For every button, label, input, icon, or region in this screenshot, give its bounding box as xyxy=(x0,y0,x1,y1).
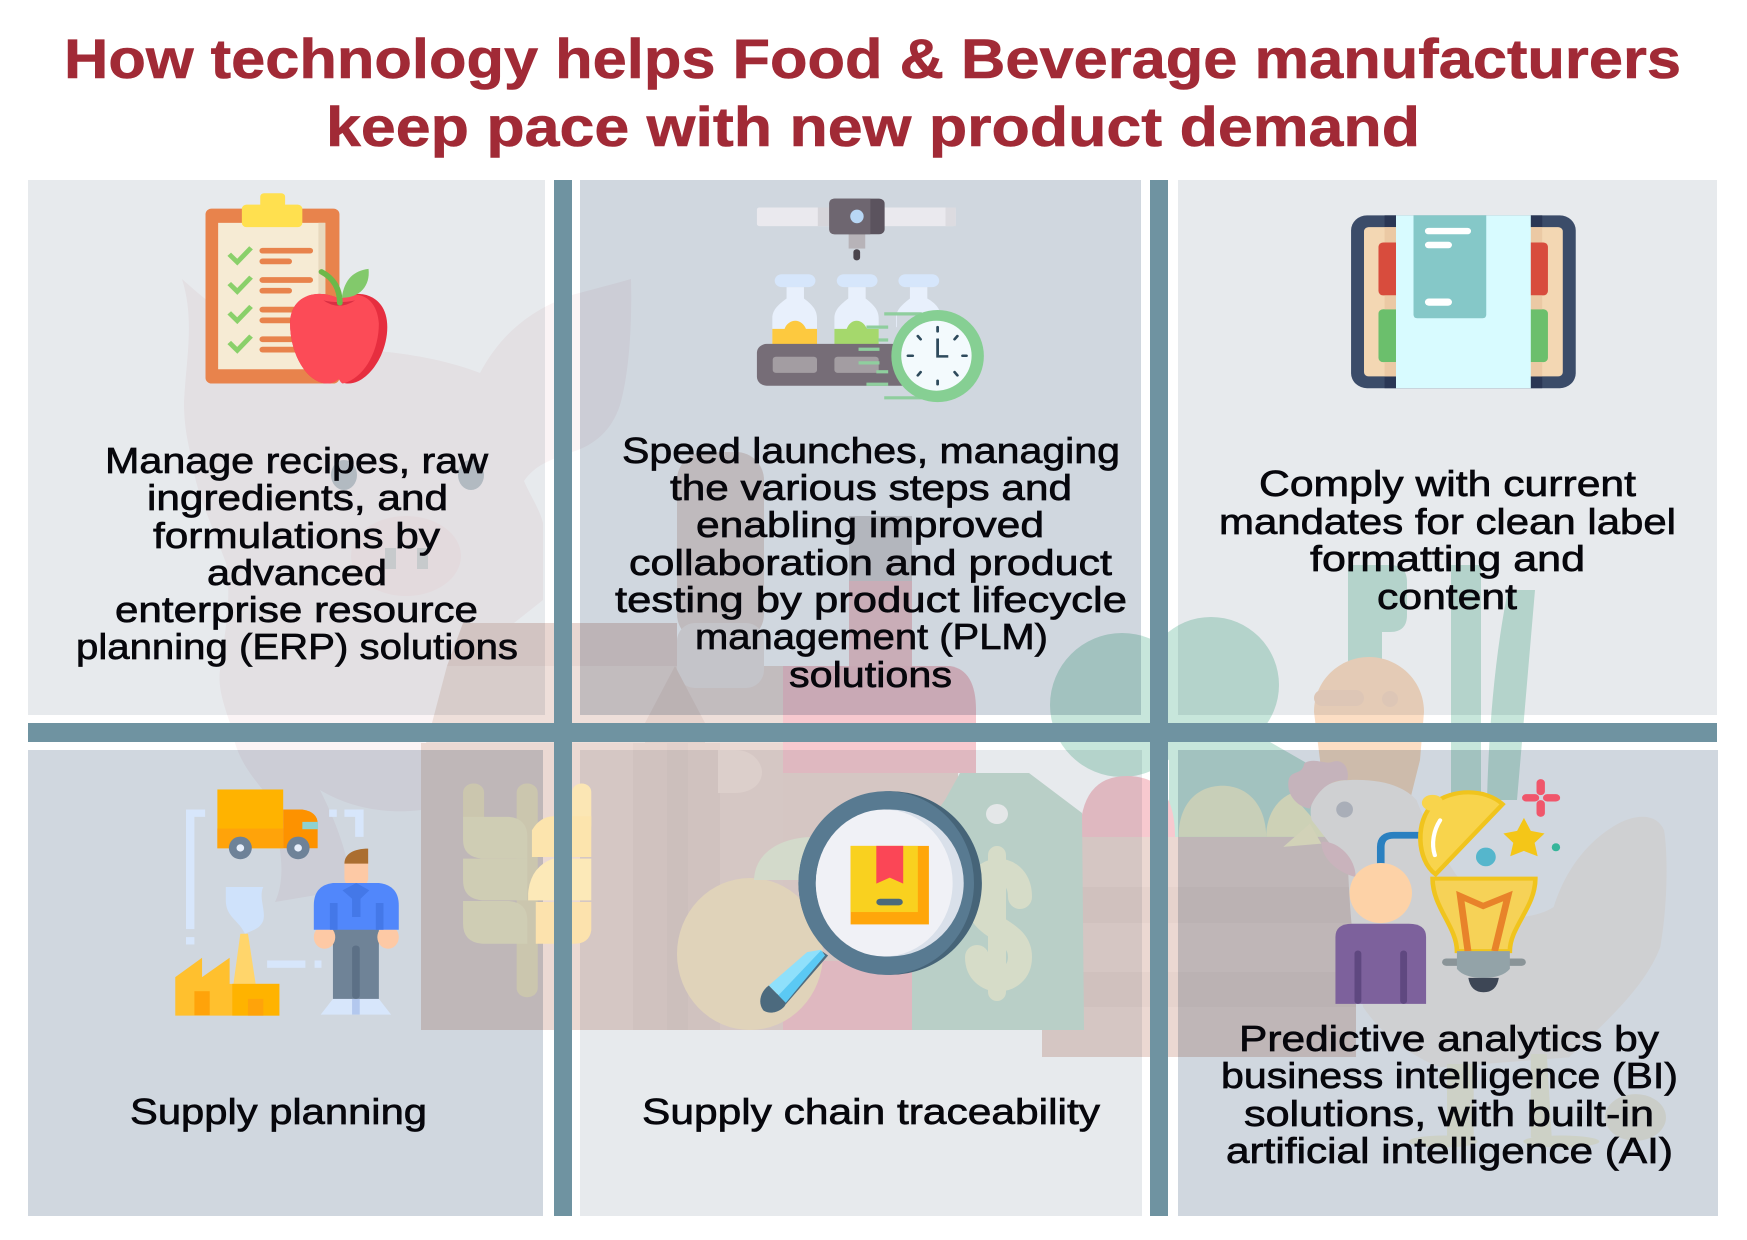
text: content xyxy=(1377,576,1517,617)
watermark: tag hole and dollar sign xyxy=(977,804,1020,992)
text: management (PLM) xyxy=(695,616,1048,657)
panel: traceability xyxy=(580,750,1142,1216)
watermark: barn and bottles xyxy=(421,452,976,1030)
text: enabling improved xyxy=(696,504,1044,545)
text: artificial intelligence (AI) xyxy=(1226,1130,1673,1171)
watermark: wheat xyxy=(463,783,591,997)
text: testing by product lifecycle xyxy=(615,579,1127,620)
watermark: green lump and light shapes xyxy=(718,750,813,880)
panel: supply planning xyxy=(28,750,543,1216)
text xyxy=(76,440,518,667)
text: mandates for clean label xyxy=(1219,501,1676,542)
text: solutions xyxy=(789,654,952,695)
text: planning (ERP) solutions xyxy=(76,626,518,667)
watermark: food illustration behind the grid xyxy=(182,279,1535,1057)
text xyxy=(1221,1018,1678,1171)
text: Supply planning xyxy=(130,1091,427,1132)
title xyxy=(64,27,1681,158)
panel: predictive analytics xyxy=(1178,750,1718,1216)
watermark: details drawn on top xyxy=(463,750,1667,1148)
text: Predictive analytics by xyxy=(1239,1018,1659,1059)
text: Supply chain traceability xyxy=(642,1091,1100,1132)
watermark: crate with vegetables xyxy=(1042,565,1535,1057)
text: formatting and xyxy=(1310,538,1585,579)
icon: person with lightbulb idea xyxy=(1335,779,1560,1004)
panel: clean label xyxy=(1178,180,1717,715)
text: the various steps and xyxy=(670,467,1072,508)
icon: clipboard with apple xyxy=(206,193,387,384)
title: How technology helps Food & Beverage manufacturers xyxy=(64,27,1681,90)
watermark: tan fruit xyxy=(677,878,823,1030)
icon: food label tray xyxy=(1351,215,1576,388)
panel: manage recipes xyxy=(28,180,545,715)
watermark: chicken xyxy=(1283,761,1667,1148)
icon: magnifier over parcel xyxy=(760,791,982,1013)
icon: truck, factory and worker xyxy=(175,789,399,1016)
text xyxy=(615,430,1127,695)
text: collaboration and product xyxy=(629,542,1112,583)
text: business intelligence (BI) xyxy=(1221,1055,1678,1096)
text xyxy=(1219,463,1676,617)
icon: bottling line with clock xyxy=(757,199,984,402)
panel: speed launches xyxy=(580,180,1141,715)
text: ingredients, and xyxy=(147,477,448,518)
title: keep pace with new product demand xyxy=(326,95,1420,158)
watermark: price tag xyxy=(912,773,1084,1030)
text: Comply with current xyxy=(1259,463,1636,504)
text: advanced xyxy=(207,552,387,593)
text: Speed launches, managing xyxy=(622,430,1120,471)
text: solutions, with built-in xyxy=(1244,1093,1654,1134)
watermark: vegetables in crate xyxy=(1179,786,1329,837)
text: enterprise resource xyxy=(115,589,478,630)
watermark: pig xyxy=(182,279,631,902)
text: formulations by xyxy=(153,515,440,556)
text: Manage recipes, raw xyxy=(105,440,489,481)
